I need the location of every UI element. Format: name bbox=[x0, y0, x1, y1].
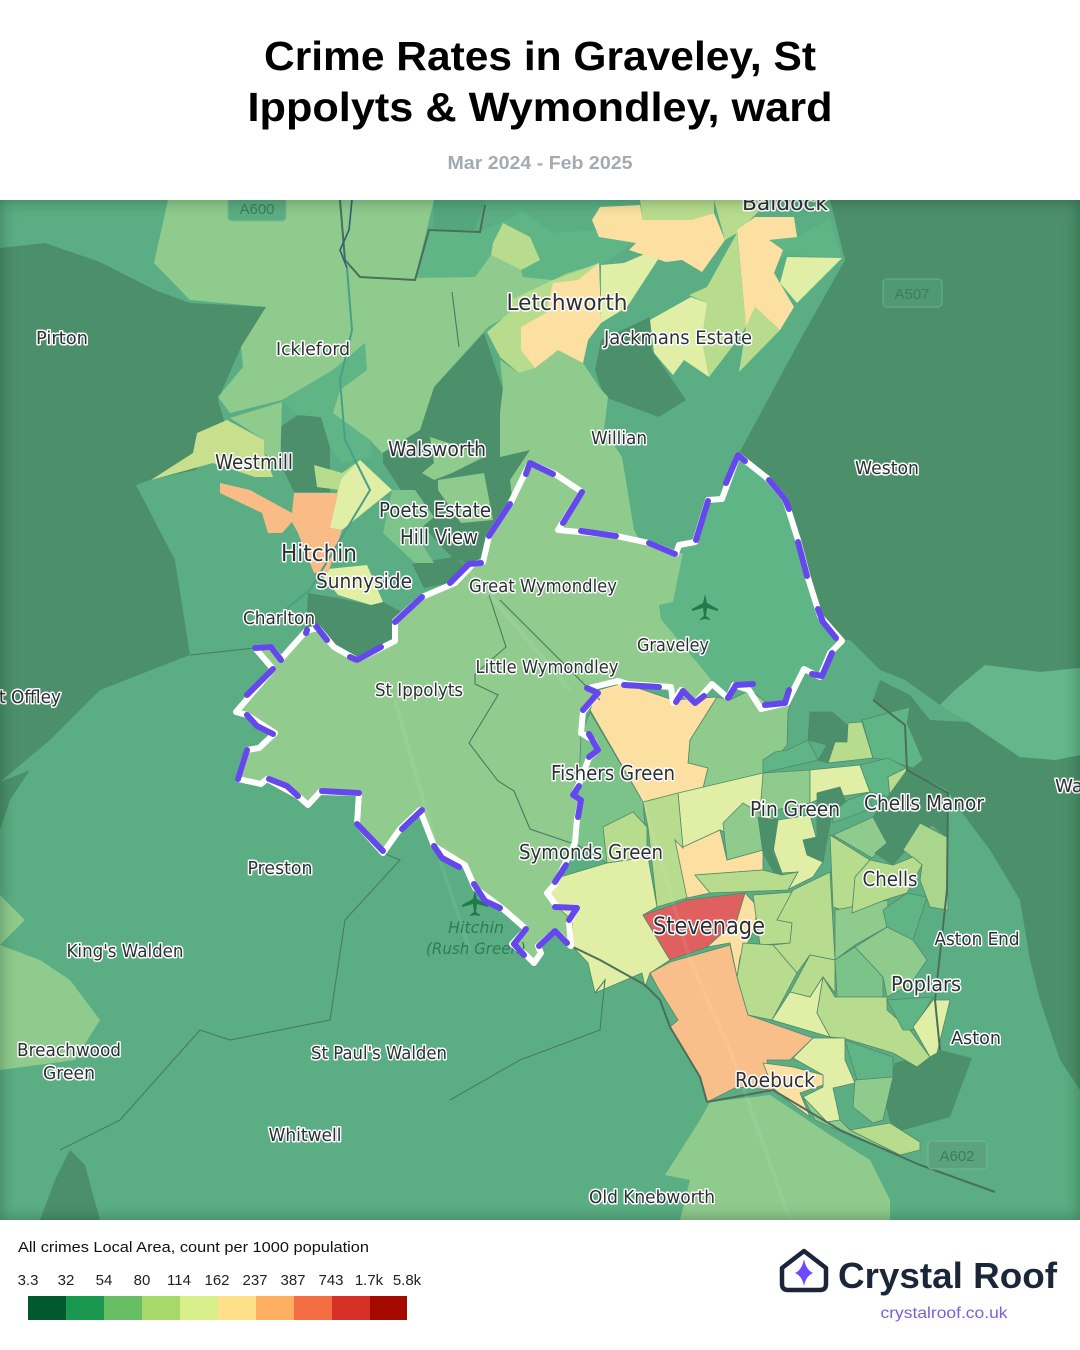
roads bbox=[437, 559, 748, 1098]
legend scale labels: 54 bbox=[96, 1272, 112, 1289]
label: Hitchin (Rush Green): (Rush Green) bbox=[426, 939, 526, 958]
road badge: A507 bbox=[883, 279, 942, 307]
pale-yellow areas bbox=[318, 250, 842, 605]
place labels: Letchworth bbox=[506, 291, 628, 316]
place labels: Sunnyside bbox=[316, 569, 412, 593]
place labels: King's Walden bbox=[66, 941, 184, 962]
place labels: Breachwood bbox=[17, 1040, 121, 1061]
legend scale labels: 237 bbox=[242, 1272, 268, 1289]
place labels: Green bbox=[43, 1063, 95, 1084]
title: Ippolyts & Wymondley, ward bbox=[248, 84, 832, 130]
place labels: Ickleford bbox=[276, 339, 350, 360]
road badge: A600 bbox=[228, 198, 286, 221]
place labels: Fishers Green bbox=[551, 761, 675, 785]
place labels: t Offley bbox=[0, 687, 61, 708]
place labels: Charlton bbox=[243, 608, 315, 629]
subtitle: date range: Mar 2024 - Feb 2025 bbox=[448, 153, 632, 173]
place labels: Graveley bbox=[637, 635, 709, 656]
legend scale labels: 743 bbox=[318, 1272, 344, 1289]
place labels: Hitchin bbox=[281, 541, 357, 567]
logo url: crystalroof.co.uk bbox=[880, 1305, 1009, 1322]
map panel bbox=[0, 191, 1080, 1220]
place labels: St Paul's Walden bbox=[311, 1043, 447, 1064]
place labels: Pin Green bbox=[750, 797, 840, 821]
pale-green areas bbox=[151, 200, 780, 490]
place labels: Whitwell bbox=[268, 1125, 342, 1146]
legend scale labels: 387 bbox=[280, 1272, 306, 1289]
place labels: Westmill bbox=[215, 450, 293, 474]
place labels: Walsworth bbox=[388, 437, 486, 461]
road badge: A600: A600 bbox=[239, 201, 275, 218]
place labels bbox=[0, 191, 1080, 1208]
ward boundary white line bbox=[236, 455, 842, 963]
cream areas bbox=[521, 205, 797, 368]
legend scale labels: 1.7k bbox=[355, 1272, 384, 1289]
title: Crime Rates in Graveley, St bbox=[264, 33, 816, 79]
road badge: A602 bbox=[928, 1141, 987, 1169]
place labels: Aston bbox=[951, 1028, 1001, 1049]
road badge: A602: A602 bbox=[939, 1148, 975, 1165]
legend colour bar bbox=[28, 1296, 407, 1320]
place labels: Little Wymondley bbox=[476, 657, 619, 678]
map edge shading bbox=[0, 200, 1080, 1220]
light-green outer areas bbox=[0, 200, 890, 1220]
Hitchin high-crime area bbox=[220, 483, 342, 573]
boundary lines bbox=[60, 292, 605, 1150]
label: Hitchin (Rush Green) bbox=[427, 921, 524, 956]
place labels: Stevenage bbox=[653, 912, 765, 940]
ward boundary bbox=[236, 455, 842, 963]
legend scale labels bbox=[18, 1272, 422, 1289]
logo: Crystal Roof bbox=[782, 1251, 1058, 1322]
legend scale labels: 32 bbox=[58, 1272, 74, 1289]
ward east part: Graveley bbox=[659, 554, 711, 680]
place labels: St Ippolyts bbox=[375, 680, 463, 701]
legend scale labels: 5.8k bbox=[393, 1272, 422, 1289]
mid-green Letchworth and Hitchin areas bbox=[282, 255, 598, 446]
ward boundary purple dashes bbox=[238, 455, 836, 955]
icon: airfield south bbox=[462, 890, 488, 916]
dark low-crime areas bbox=[0, 200, 1080, 1220]
logo wordmark: Crystal Roof bbox=[838, 1255, 1058, 1296]
ward fill bbox=[242, 504, 711, 958]
icon: airfield north bbox=[692, 594, 718, 620]
Stevenage neighbourhoods bbox=[547, 683, 950, 1155]
legend scale labels: 3.3 bbox=[18, 1272, 38, 1289]
place labels: Willian bbox=[591, 428, 647, 449]
place labels: Old Knebworth bbox=[589, 1187, 715, 1208]
legend title: All crimes Local Area, count per 1000 population bbox=[18, 1239, 369, 1256]
place labels: Chells bbox=[862, 867, 918, 891]
legend bbox=[18, 1239, 422, 1320]
label: Hitchin (Rush Green): Hitchin bbox=[448, 918, 504, 937]
place labels: Weston bbox=[855, 458, 919, 479]
legend scale labels: 162 bbox=[204, 1272, 230, 1289]
place labels: Great Wymondley bbox=[469, 576, 617, 597]
title bbox=[248, 33, 832, 130]
place labels: Pirton bbox=[36, 328, 88, 349]
place labels: Hill View bbox=[400, 525, 478, 549]
place labels: Roebuck bbox=[735, 1068, 815, 1092]
lighter band east of Stevenage bbox=[940, 665, 1080, 760]
place labels: Symonds Green bbox=[519, 840, 663, 864]
place labels: Chells Manor bbox=[864, 791, 985, 815]
place labels: Jackmans Estate bbox=[603, 327, 752, 349]
place labels: Poplars bbox=[891, 972, 961, 996]
legend scale labels: 80 bbox=[134, 1272, 150, 1289]
river bbox=[340, 200, 352, 268]
place labels: Poets Estate bbox=[379, 498, 491, 522]
place labels: Aston End bbox=[934, 929, 1020, 950]
place labels: Preston bbox=[248, 858, 312, 879]
place labels: Baldock bbox=[742, 191, 829, 215]
road badge: A507: A507 bbox=[894, 286, 930, 303]
icon: house with star bbox=[782, 1251, 826, 1290]
legend scale labels: 114 bbox=[167, 1272, 191, 1289]
